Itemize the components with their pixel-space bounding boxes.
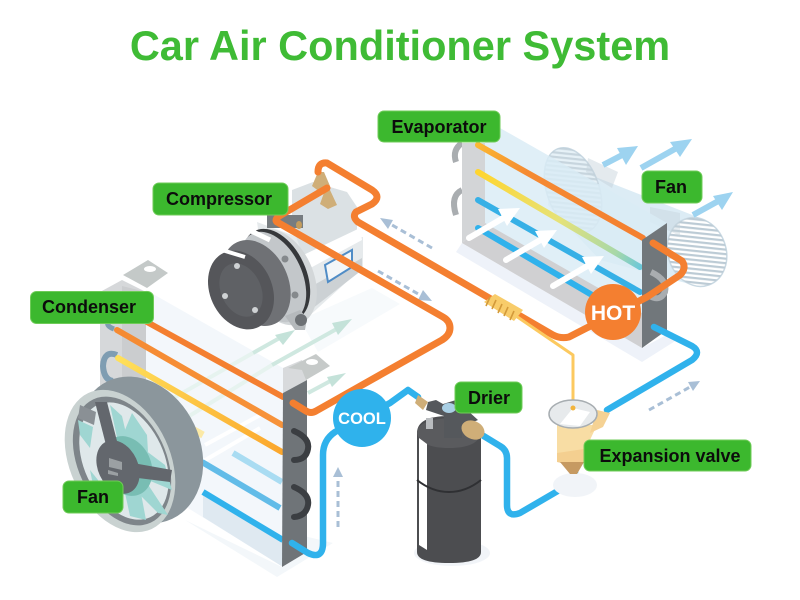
compressor body — [257, 182, 363, 318]
blower wheel — [534, 140, 736, 295]
orange suction pipe — [318, 163, 684, 338]
flow arrow: toward condenser — [378, 271, 432, 301]
capillary line — [516, 316, 573, 408]
flow arrow: up to cool — [333, 467, 343, 527]
condenser floor shadow — [185, 520, 333, 577]
evaporator left hoses — [454, 143, 462, 215]
label: Condenser — [30, 292, 154, 324]
label: Drier: Drier — [468, 388, 510, 408]
condenser right frame — [282, 354, 330, 567]
valve body — [557, 410, 610, 474]
label: Compressor: Compressor — [166, 189, 272, 209]
fan housing rim — [54, 356, 226, 544]
label: Fan (blower) — [642, 171, 702, 203]
label: Evaporator — [378, 111, 500, 142]
condenser fan — [43, 356, 226, 550]
blue liquid pipe from condenser — [292, 390, 418, 555]
label: Fan (condenser): Fan — [77, 487, 109, 507]
badge: COOL: COOL — [338, 410, 386, 428]
refrigerant pipes — [276, 163, 697, 555]
label: Drier — [455, 382, 522, 413]
condenser panel — [146, 290, 283, 567]
valve diaphragm — [549, 400, 597, 428]
blue pipe drier to valve — [482, 435, 575, 514]
compressor clutch pulley — [196, 217, 331, 340]
label: Fan (blower): Fan — [655, 177, 687, 197]
label: Expansion valve: Expansion valve — [599, 446, 741, 466]
label: Compressor — [153, 183, 288, 215]
expansion coil — [484, 294, 523, 321]
evaporator right frame — [642, 223, 667, 348]
badge: COOL — [333, 389, 391, 447]
title: Car Air Conditioner System — [130, 22, 670, 69]
expansion valve — [549, 400, 610, 497]
drier — [414, 395, 490, 566]
evaporator tubes — [478, 145, 643, 295]
label: Condenser: Condenser — [42, 297, 136, 317]
condenser tubes — [117, 322, 283, 540]
compressor — [196, 172, 363, 340]
evaporator shadow — [456, 243, 680, 362]
drier canister — [417, 416, 481, 563]
badge: HOT — [585, 284, 641, 340]
badge: HOT: HOT — [591, 302, 635, 325]
valve shadow — [553, 473, 597, 497]
dashed flow arrows — [333, 218, 700, 527]
label: Expansion valve — [584, 440, 751, 471]
blue pipe valve to evaporator — [607, 327, 697, 410]
evaporator core — [485, 128, 667, 348]
drier head and fittings — [415, 395, 488, 443]
evaporator — [454, 128, 736, 362]
fan blades — [78, 405, 172, 520]
drier shadow — [414, 540, 490, 566]
evaporator bottom plate — [462, 223, 642, 348]
label: Evaporator: Evaporator — [391, 117, 487, 137]
evaporator airflow arrows — [469, 208, 604, 286]
condenser — [100, 260, 352, 577]
orange high pressure pipe — [276, 188, 450, 412]
blower outflow arrows — [603, 139, 733, 215]
compressor floor shadow — [300, 288, 400, 352]
evaporator left frame — [462, 143, 485, 243]
flow arrow: toward compressor — [380, 218, 432, 248]
compressor fittings — [312, 172, 337, 209]
condenser left frame and bracket — [100, 260, 168, 400]
fan spokes and hub — [88, 402, 172, 501]
flow arrow: to evaporator — [649, 381, 700, 410]
condenser airflow arrows — [170, 319, 352, 462]
label: Fan (condenser) — [63, 481, 123, 513]
